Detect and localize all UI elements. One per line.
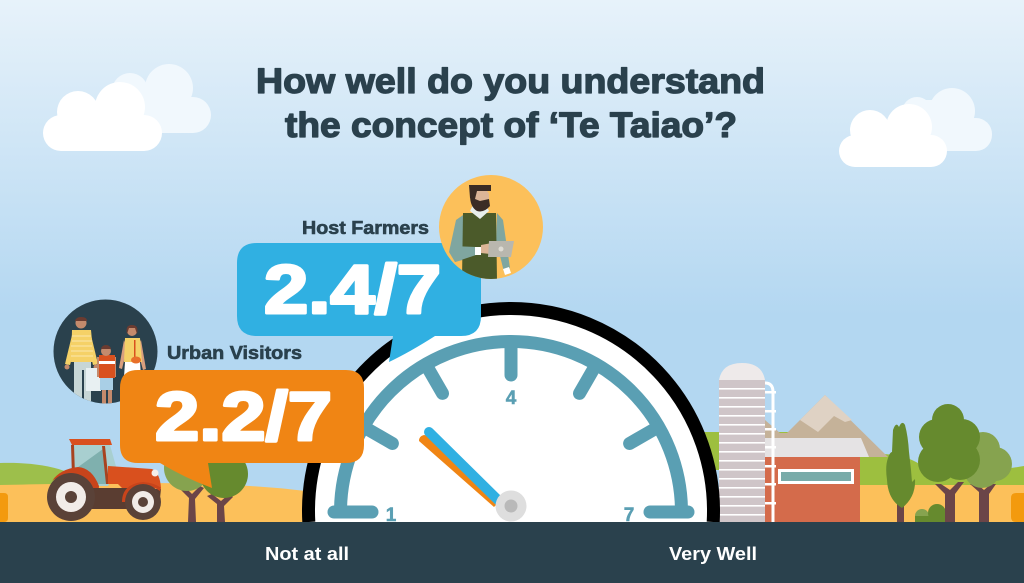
cloud: left back [112,64,211,133]
urban visitors portrait [54,300,158,404]
host farmers label: Host Farmers [302,218,429,238]
gauge: scale numbers: 7 [624,505,634,526]
gauge: teal scale arc and ticks [334,342,688,518]
gauge: scale numbers [386,388,634,526]
cloud: right back [902,88,992,151]
scale label: very well: Very Well [669,544,757,564]
gauge: hub [496,490,526,522]
title: the concept of ‘Te Taiao’? [285,106,737,145]
cloud: right front [839,104,947,167]
left landscape [0,463,305,522]
left trees [164,445,248,522]
mountain [765,395,888,457]
bottom bar [0,522,1024,583]
urban visitors callout [120,370,364,488]
gauge: host farmers needle [429,432,499,501]
cloud: left front [43,82,162,151]
host farmers callout: 2.4/7 [264,251,441,328]
gauge: scale numbers: 4 [506,388,517,409]
urban visitors label: Urban Visitors [167,343,302,363]
gauge: urban visitors needle [419,435,498,507]
right landscape [700,432,1024,522]
host farmers callout [237,243,481,362]
gauge: dial face and rim [309,308,714,522]
barn [765,438,869,522]
scale label: not at all: Not at all [265,544,349,564]
right trees [886,404,1012,523]
title [256,62,765,145]
urban visitors callout: 2.2/7 [155,378,332,455]
host farmer portrait [439,175,543,280]
tractor [47,439,161,521]
gauge [309,308,714,526]
gauge: scale numbers: 1 [386,505,397,526]
silo [719,363,776,522]
title: How well do you understand [256,62,765,101]
